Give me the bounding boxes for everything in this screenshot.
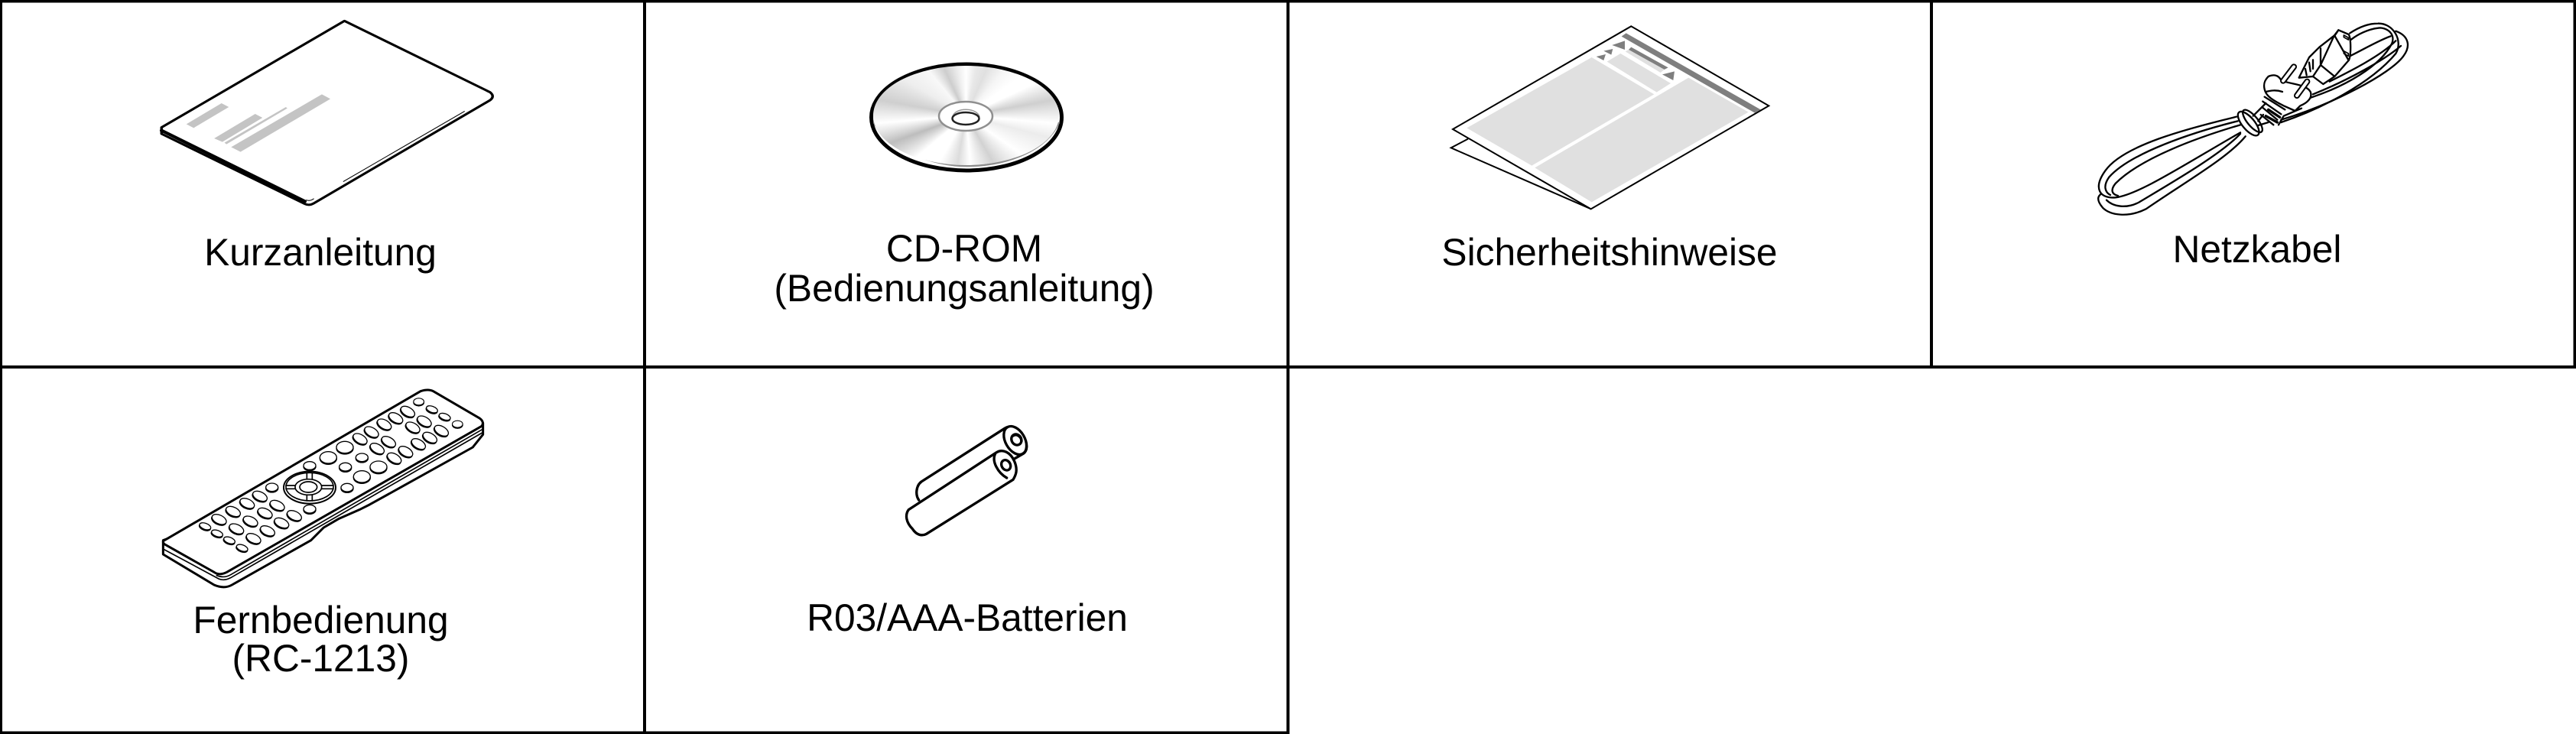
- panel: CD-ROM: [645, 2, 1288, 367]
- icon: batteries: [907, 422, 1031, 535]
- panel: Netzkabel: [1931, 2, 2575, 367]
- panel: Fernbedienung: [1, 367, 645, 732]
- label: Fernbedienung (RC-1213): (RC-1213): [232, 637, 409, 680]
- label: Fernbedienung (RC-1213): Fernbedienung: [193, 599, 449, 641]
- panel: Kurzanleitung: [1, 2, 645, 367]
- label: CD-ROM: CD-ROM: [886, 227, 1042, 270]
- label: Kurzanleitung: Kurzanleitung: [204, 231, 437, 274]
- icon: power cord: [2098, 24, 2408, 215]
- label: R03/AAA-Batterien: R03/AAA-Batterien: [807, 596, 1128, 639]
- icon: CD-ROM disc: [872, 64, 1061, 171]
- panel: R03/AAA-Batterien: [645, 367, 1288, 732]
- label: Sicherheitshinweise: Sicherheitshinweise: [1441, 231, 1778, 274]
- icon: leaflet: [1451, 26, 1769, 209]
- remote buttons: [198, 398, 463, 554]
- icon: booklet: [161, 21, 492, 205]
- label: CD-ROM: [774, 227, 1155, 310]
- panel: Sicherheitshinweise: [1288, 2, 1931, 367]
- label: Fernbedienung (RC-1213): [193, 599, 449, 680]
- remote d-pad: [284, 472, 336, 504]
- label: CD-ROM: (Bedienungsanleitung): [774, 267, 1155, 310]
- label: Netzkabel: Netzkabel: [2173, 228, 2341, 271]
- icon: remote control: [163, 390, 483, 587]
